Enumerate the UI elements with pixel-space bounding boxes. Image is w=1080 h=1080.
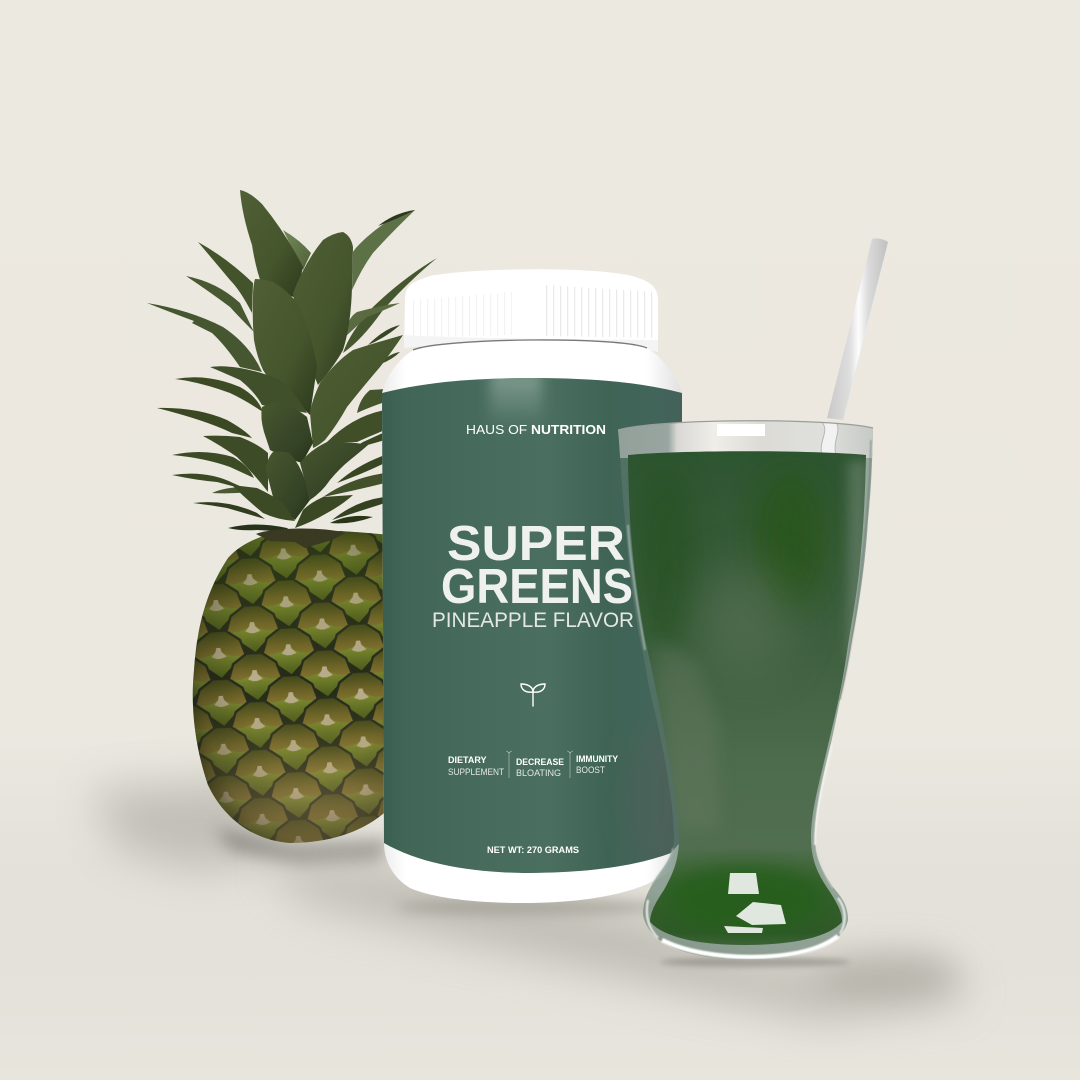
bottle label [380, 372, 695, 880]
floor shadows [90, 780, 970, 1020]
pineapple [147, 190, 437, 850]
benefit: immunity boost: BOOST [576, 765, 605, 775]
product title: GREENS [441, 560, 633, 614]
benefit: immunity boost [576, 754, 618, 775]
benefit: decrease bloating: DECREASE [516, 757, 564, 767]
pineapple crown base [256, 529, 345, 548]
benefit: dietary supplement [448, 755, 504, 777]
glass foot highlights [647, 848, 845, 957]
benefit: decrease bloating: BLOATING [516, 768, 561, 778]
cap shadow line [413, 340, 647, 350]
net weight: NET WT: 270 GRAMS [487, 845, 579, 856]
benefit: decrease bloating [516, 757, 564, 778]
product title: SUPER [447, 517, 625, 571]
pineapple crown front leaves [203, 190, 403, 528]
divider with sprout [506, 751, 512, 778]
pineapple body [192, 530, 384, 843]
benefit: dietary supplement: DIETARY [448, 755, 487, 765]
divider with sprout [567, 751, 573, 778]
glass body [618, 421, 873, 960]
icon: sprout [521, 684, 545, 706]
label text [432, 422, 634, 856]
benefit: dietary supplement: SUPPLEMENT [448, 767, 504, 777]
product title [441, 517, 633, 614]
pineapple crown back leaves [147, 210, 437, 532]
rim edge [618, 421, 873, 430]
bottle body white [382, 339, 682, 903]
bottle cap [404, 269, 658, 352]
glass right edge highlight [840, 440, 871, 700]
glass left edge highlight [628, 525, 645, 650]
brand name: HAUS OF NUTRITION [466, 422, 606, 437]
green juice [620, 448, 870, 953]
glass right lower highlight [815, 745, 832, 845]
flavor line: PINEAPPLE FLAVOR [432, 609, 634, 632]
benefit: immunity boost: IMMUNITY [576, 754, 618, 764]
glass of green juice [616, 418, 876, 960]
glass rim band [616, 418, 876, 458]
supplement bottle [380, 269, 695, 903]
straw [827, 238, 888, 420]
juice reflections [724, 873, 786, 933]
